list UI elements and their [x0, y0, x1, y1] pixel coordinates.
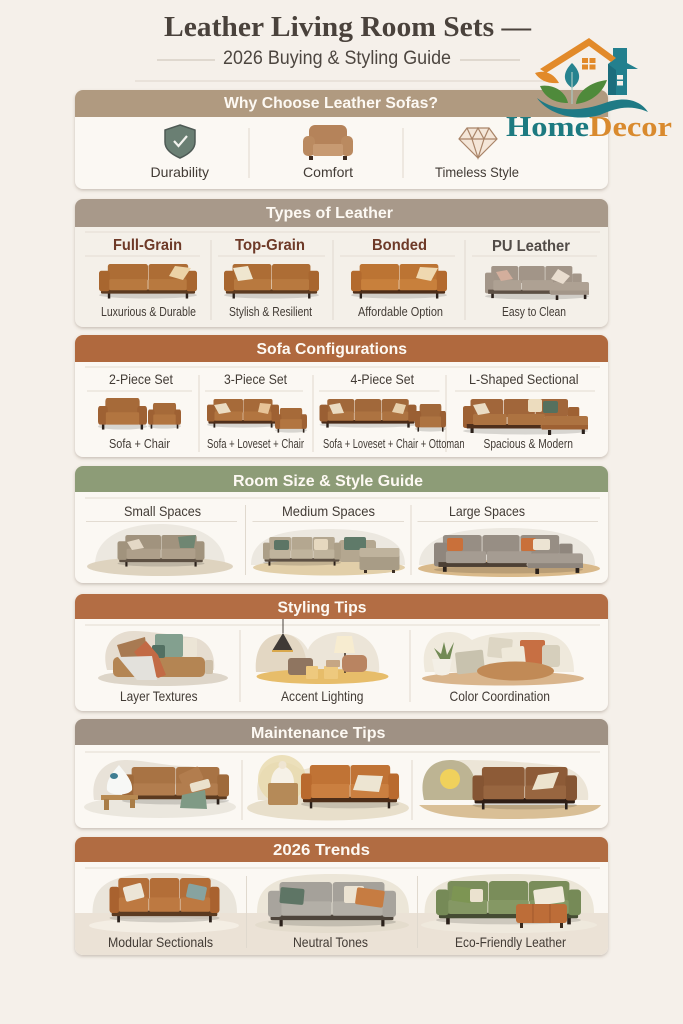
- label: Comfort: [303, 164, 353, 180]
- column title: Medium Spaces: [282, 503, 375, 519]
- scene: neutral tones: [255, 874, 409, 933]
- column title: L-Shaped Sectional: [469, 371, 578, 387]
- scene: humidifier and sofa: [84, 760, 236, 818]
- column title: 4-Piece Set: [350, 371, 414, 387]
- 4-piece sofa set: [320, 399, 446, 432]
- icon: house and leaves: [535, 38, 648, 118]
- 3-piece sofa set: [207, 399, 307, 433]
- panel: styling tips: [75, 594, 608, 711]
- label: Layer Textures: [120, 688, 198, 704]
- scene: eco-friendly leather: [421, 874, 597, 933]
- scene: sun and sofa: [419, 760, 601, 819]
- bonded title: Bonded: [372, 237, 427, 254]
- title: Leather Living Room Sets —: [164, 11, 532, 43]
- label: Easy to Clean: [502, 305, 566, 319]
- heading: Why Choose Leather Sofas?: [224, 95, 438, 112]
- heading: Maintenance Tips: [251, 725, 386, 742]
- label: Spacious & Modern: [484, 437, 573, 451]
- logo: home decor: [506, 38, 672, 143]
- label: Timeless Style: [435, 164, 519, 180]
- heading: Room Size & Style Guide: [233, 473, 423, 490]
- heading: 2026 Trends: [273, 842, 370, 859]
- panel: maintenance tips: [75, 719, 608, 828]
- label: Accent Lighting: [281, 688, 364, 704]
- column title: Small Spaces: [124, 503, 201, 519]
- l-shaped sectional: [463, 399, 588, 435]
- label: Eco-Friendly Leather: [455, 934, 566, 950]
- scene: small space: [87, 524, 233, 576]
- top-grain title: Top-Grain: [235, 237, 305, 254]
- label: Durability: [150, 164, 209, 180]
- column title: 2-Piece Set: [109, 371, 173, 387]
- label: Sofa + Chair: [109, 437, 170, 451]
- heading: Sofa Configurations: [256, 341, 407, 358]
- label: Sofa + Loveset + Chair: [207, 437, 304, 451]
- logo wordmark: Home Decor: [506, 112, 672, 143]
- heading: Styling Tips: [278, 600, 367, 616]
- label: Neutral Tones: [293, 934, 368, 950]
- column title: 3-Piece Set: [224, 371, 287, 387]
- panel: why choose leather sofas: [75, 90, 608, 189]
- sofa: pu leather: [485, 266, 589, 300]
- scene: layer textures: [98, 631, 228, 686]
- sofa: top-grain: [224, 264, 319, 299]
- scene: large space: [418, 528, 600, 577]
- sofa: full-grain: [99, 264, 197, 299]
- sofa: bonded: [351, 264, 447, 299]
- scene: modular sectionals: [89, 873, 239, 933]
- label: Sofa + Loveset + Chair + Ottoman: [323, 437, 465, 451]
- scene: lamp and sofa: [247, 755, 409, 820]
- subtitle: 2026 Buying & Styling Guide: [223, 48, 451, 69]
- icon: shield: [165, 125, 195, 158]
- panel: 2026 trends: [75, 837, 608, 955]
- panel: sofa configurations: [75, 335, 608, 457]
- label: Color Coordination: [450, 688, 550, 704]
- scene: accent lighting: [256, 619, 388, 684]
- icon: armchair: [303, 125, 353, 160]
- label: Stylish & Resilient: [229, 305, 312, 319]
- pu leather title: PU Leather: [492, 238, 570, 255]
- 2-piece sofa set: [98, 398, 181, 430]
- label: Modular Sectionals: [108, 934, 213, 950]
- scene: color coordination: [422, 632, 584, 686]
- panel: types of leather: [75, 199, 608, 327]
- column title: Large Spaces: [449, 503, 525, 519]
- icon: diamond: [459, 128, 497, 158]
- label: Affordable Option: [358, 305, 443, 319]
- full-grain title: Full-Grain: [113, 237, 182, 254]
- panel: room size and style guide: [75, 466, 608, 583]
- scene: medium space: [251, 529, 405, 576]
- heading: Types of Leather: [266, 205, 393, 222]
- label: Luxurious & Durable: [101, 305, 196, 319]
